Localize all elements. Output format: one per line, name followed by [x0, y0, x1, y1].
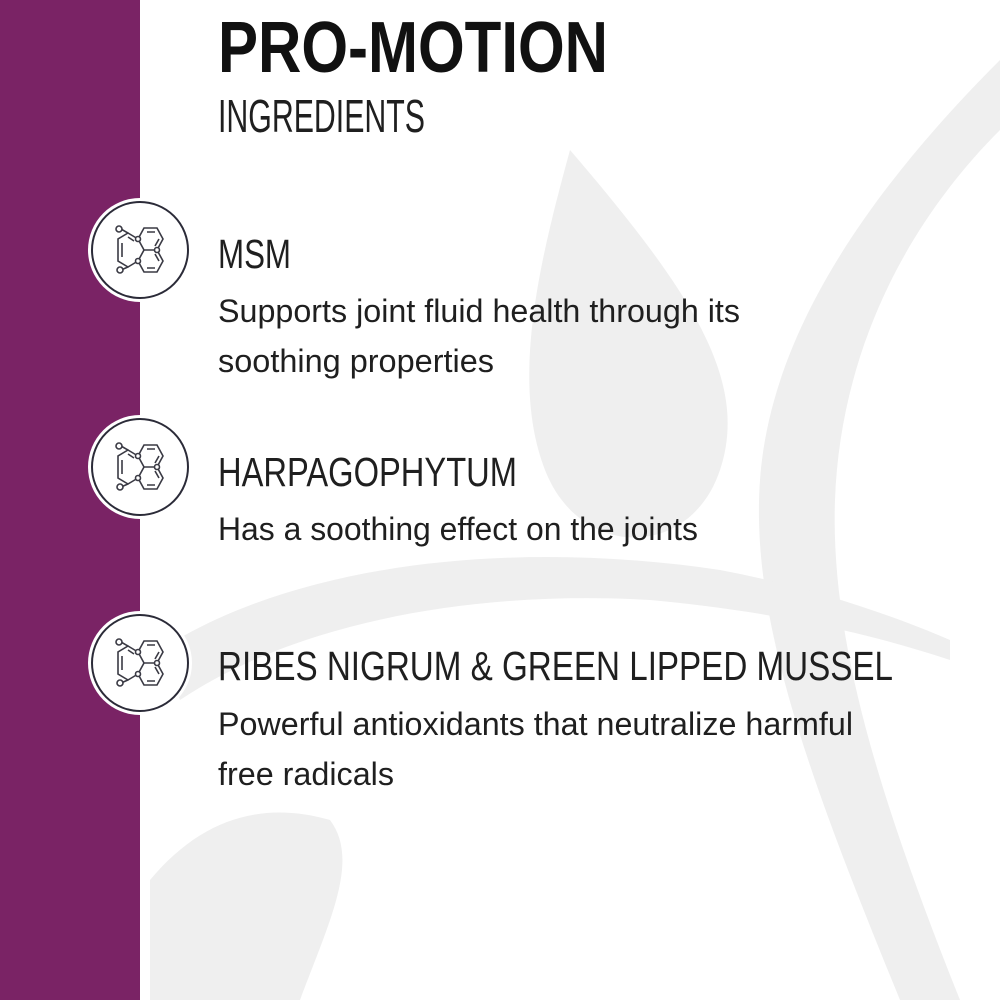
item: MSM: Supports joint fluid health through its	[218, 293, 740, 329]
title: PRO-MOTION	[218, 8, 608, 88]
item: RIBES NIGRUM	[218, 643, 893, 792]
item: MSM: MSM	[218, 231, 291, 277]
item: HARPAGOPHYTUM	[218, 449, 698, 547]
background watermark	[150, 60, 1000, 1000]
item: RIBES NIGRUM: free radicals	[218, 756, 394, 792]
item: MSM	[218, 231, 740, 379]
icon: molecule 1	[88, 198, 192, 302]
subtitle: INGREDIENTS	[218, 90, 425, 142]
icon: molecule 3	[88, 611, 192, 715]
item: RIBES NIGRUM: Powerful antioxidants that neutralize harmful	[218, 706, 853, 742]
icon: molecule 2	[88, 415, 192, 519]
item: HARPAGOPHYTUM: HARPAGOPHYTUM	[218, 449, 517, 495]
purple side bar	[0, 0, 140, 1000]
item: MSM: soothing properties	[218, 343, 494, 379]
item: HARPAGOPHYTUM: Has a soothing effect on the joints	[218, 511, 698, 547]
